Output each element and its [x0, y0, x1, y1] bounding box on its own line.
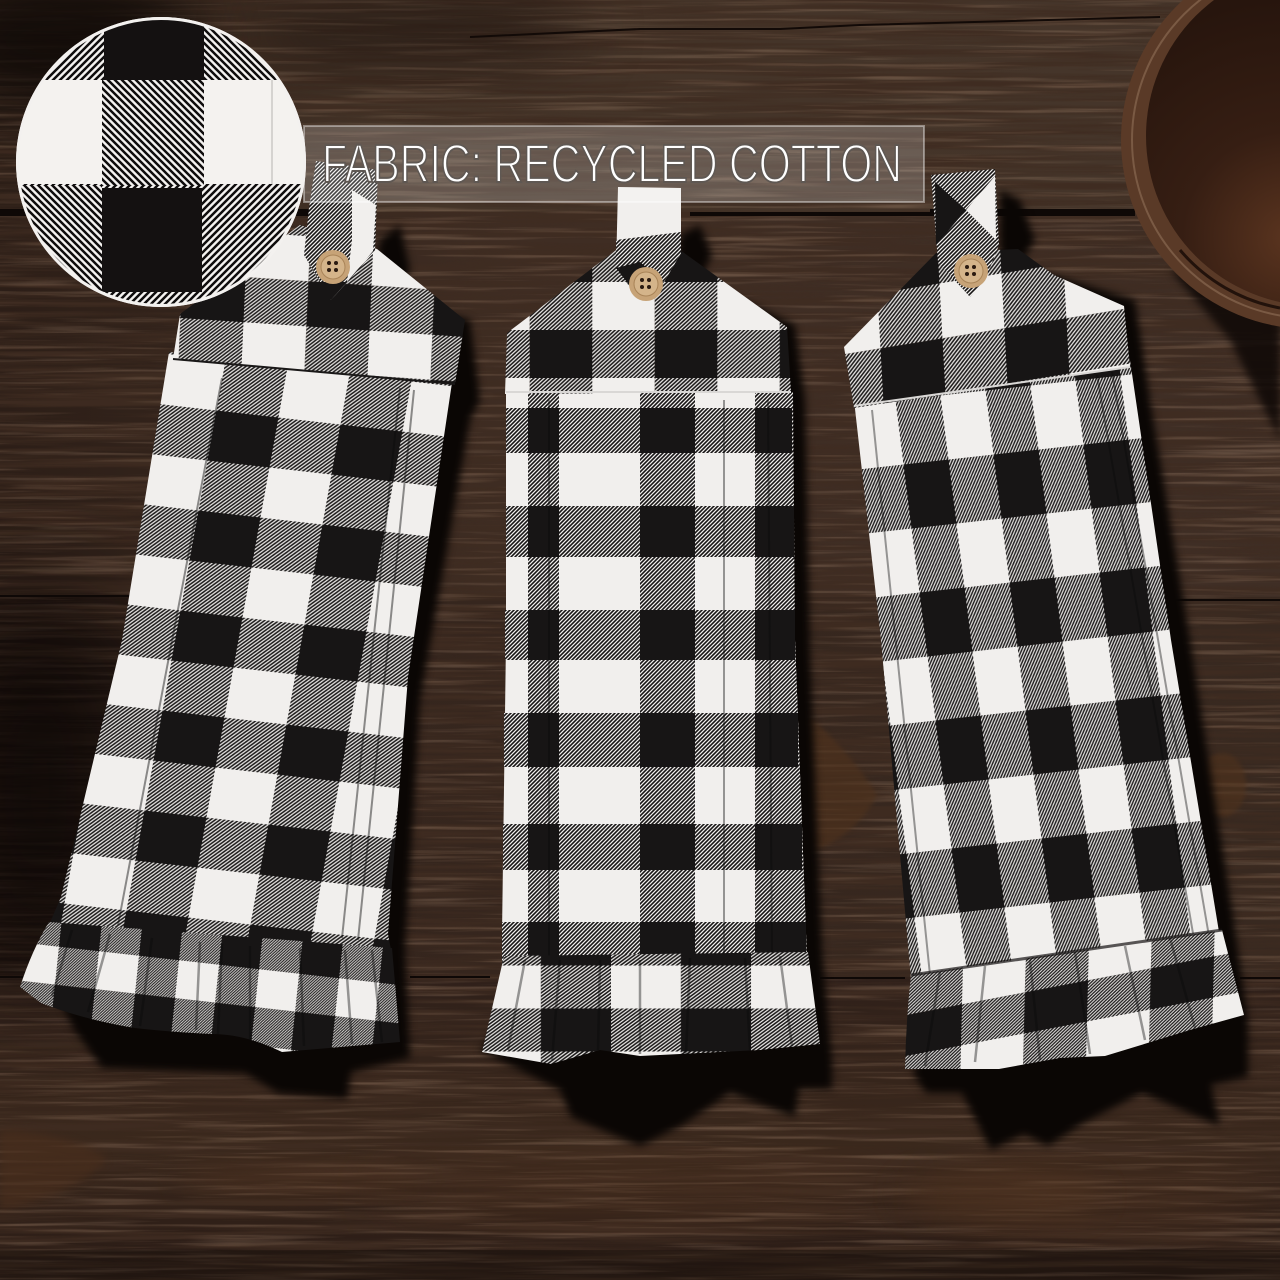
towel 1	[20, 161, 465, 1052]
towel 3 wooden button	[954, 254, 988, 288]
towel 2 ruffle folds	[508, 956, 792, 1060]
towel 3 body	[854, 360, 1226, 990]
fabric label plate	[304, 126, 924, 202]
fabric swatch magnifier circle	[10, 10, 310, 310]
towel 2 pleat seams	[549, 400, 772, 958]
wood knot right	[1198, 753, 1246, 817]
towel 2 ruffle	[482, 952, 820, 1064]
wood knot bottom	[900, 1167, 1100, 1223]
towel 2 collar	[505, 250, 791, 394]
towel 1 ruffle folds	[52, 930, 382, 1046]
towel 3 ruffle folds	[925, 938, 1195, 1066]
towel 3 collar hem	[854, 367, 1130, 406]
towel 2 collar hem	[506, 391, 791, 393]
wooden bowl shadow	[1170, 270, 1280, 440]
towel 3 hem line	[911, 930, 1222, 975]
towel 3 hanging tab	[931, 169, 999, 297]
towel 3 ruffle	[905, 930, 1244, 1069]
towel 2 body	[502, 392, 807, 964]
towel 2 wooden button	[629, 267, 663, 301]
towel 1 collar	[173, 225, 465, 384]
towel shadows	[60, 190, 1248, 1150]
wood knot centre	[805, 715, 877, 852]
wooden bowl	[1121, 0, 1280, 329]
towel 1 ruffle	[20, 922, 400, 1052]
fabric label text: FABRIC: RECYCLED COTTON	[322, 134, 902, 194]
towel 3 collar	[844, 249, 1130, 408]
towel 3 pleat seams	[872, 372, 1210, 975]
wood knot left	[0, 1130, 106, 1210]
towel 1 pleat seams	[118, 378, 414, 940]
towel 2 hanging tab	[616, 187, 681, 299]
towel 1 wooden button	[316, 250, 350, 284]
towel 2	[482, 187, 820, 1064]
towel 1 body	[49, 352, 453, 955]
towel 3	[844, 169, 1244, 1069]
towel 1 collar hem	[173, 359, 455, 384]
towel 1 hanging tab	[304, 161, 378, 300]
